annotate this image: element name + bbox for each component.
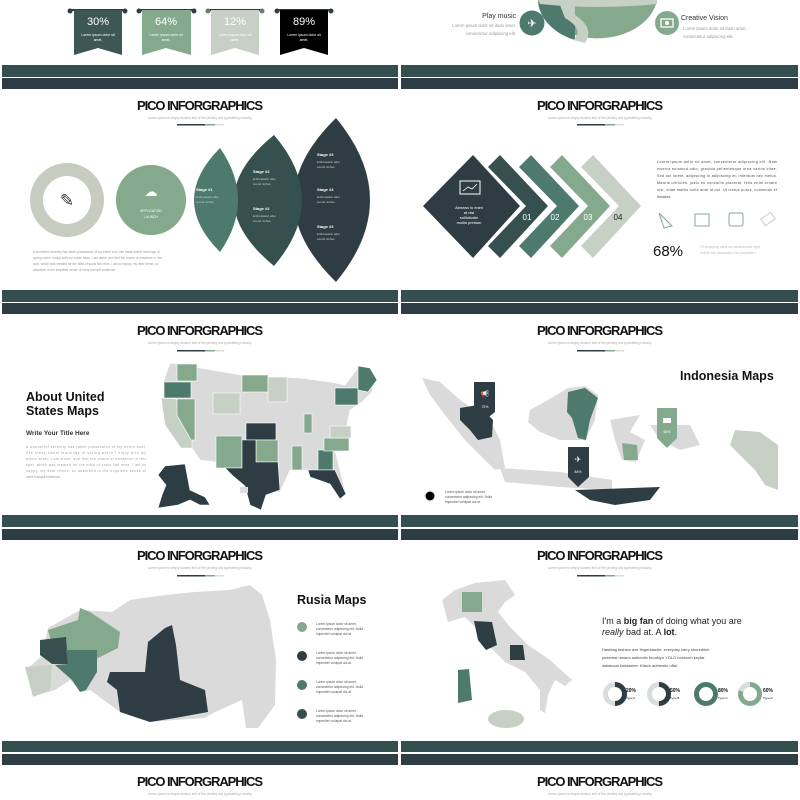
application launch circle: APPLICATION: [140, 209, 162, 213]
donut charts: Type B: [670, 696, 679, 700]
heading: Lorem Ipsum is simply dummy text of the printing and typesetting industry.: [548, 116, 652, 120]
legend list: consectetur adipiscing elit. Nulla: [316, 685, 363, 689]
heading: bottom-right slide: PICO INFORGRAPHICS: [537, 774, 663, 789]
heading: [537, 548, 663, 576]
application launch circle: LAUNCH: [144, 215, 158, 219]
legend list: consectetur adipiscing elit. Nulla: [316, 627, 363, 631]
stage 2 petal: sound niches.: [253, 219, 272, 223]
panel: Russia slide: [25, 548, 367, 728]
legend: imperdiet volutpat dui at.: [445, 500, 481, 504]
heading: [537, 323, 663, 352]
Play music: Play music: [482, 13, 516, 20]
icon: camera: [655, 11, 679, 35]
legend list: Lorem ipsum dolor sit amet,: [316, 622, 357, 626]
stage 2 petal: Stage #2: [253, 169, 270, 174]
legend list: Lorem ipsum dolor sit amet,: [316, 651, 357, 655]
text block: Lorem ipsum dolor sit amet, consectetur adipiscing elit. Nam: [657, 160, 777, 164]
pin 65%: [657, 408, 677, 448]
icon: plane: ✈: [527, 18, 537, 30]
text block: Sed dui lorem, adipiscing in adipiscing et, interdum nec metus.: [657, 174, 777, 178]
heading: [137, 323, 263, 352]
banner 64%: 64%: [155, 16, 177, 28]
panel: US map slide: [26, 323, 377, 510]
stage 3 petal: Enthusiastic after: [317, 232, 340, 236]
panel: Indonesia slide: [422, 323, 778, 505]
stage 3 petal: Enthusiastic after: [317, 195, 340, 199]
chevron 03: [550, 155, 610, 258]
chevron 02: 02: [551, 213, 560, 222]
heading: bottom-right slide: [537, 774, 663, 796]
heading: [137, 548, 263, 576]
panel: stages slide: [30, 98, 370, 282]
heading: PICO INFORGRAPHICS: [537, 98, 663, 113]
about text: spot, which was created for the bliss of souls like mine. I am so: [26, 463, 146, 467]
banner 64%: amet,: [162, 38, 170, 42]
heading: PICO INFORGRAPHICS: [137, 323, 263, 338]
banner 30%: 30%: [87, 16, 109, 28]
icon ring: ✎: [60, 191, 74, 210]
stat 68%: 68%: [653, 243, 683, 260]
stage 3 petal: Stage #3: [317, 187, 334, 192]
legend list: imperdiet volutpat dui at.: [316, 690, 352, 694]
banner 12%: 12%: [224, 16, 246, 28]
main diamond: Aenean in enim: [455, 205, 484, 210]
banner 64%: Lorem ipsum dolor sit: [149, 33, 183, 37]
Russia map: [25, 585, 276, 728]
pin 72%: 72%: [481, 405, 489, 409]
chevron 03: 03: [584, 213, 593, 222]
Creative Vision: consectetur adipiscing elit.: [683, 34, 733, 39]
legend list: imperdiet volutpat dui at.: [316, 632, 352, 636]
Creative Vision: [681, 15, 747, 39]
legend list: imperdiet volutpat dui at.: [316, 661, 352, 665]
Play music: consectetur adipiscing elit.: [466, 31, 516, 36]
legend list: [297, 622, 363, 723]
quote text: [602, 616, 742, 668]
banner 89%: amet,: [300, 38, 308, 42]
legend list: Lorem ipsum dolor sit amet,: [316, 709, 357, 713]
donut charts: Type C: [718, 696, 728, 700]
stage 1 petal: [194, 148, 238, 252]
application launch circle: [116, 165, 186, 235]
banner 89%: [274, 8, 334, 55]
heading: PICO INFORGRAPHICS: [137, 548, 263, 563]
text block: tincidunt.: [657, 195, 671, 199]
icon ring: [30, 163, 104, 237]
stage 3 petal: Enthusiastic after: [317, 160, 340, 164]
donut charts: Type D: [763, 696, 773, 700]
quote text: I'm a big fan of doing what you are: [602, 616, 742, 626]
about text: A wonderful serenity has taken possession of my entire soul,: [26, 445, 146, 449]
heading: bottom-left slide: [137, 774, 263, 796]
text block: Mauris ultricies, justo eu convallis placerat, felis enim ornare: [657, 181, 777, 185]
legend list: consectetur adipiscing elit. Nulla: [316, 656, 363, 660]
icon: plane: [520, 10, 544, 36]
banner 12%: [206, 8, 264, 55]
chevron 02: [519, 155, 579, 258]
panel: globe (top-right): [452, 0, 747, 43]
donut charts: 80%: [718, 688, 729, 694]
heading: PICO INFORGRAPHICS: [137, 98, 263, 113]
banner 89%: Lorem ipsum dolor sit: [287, 33, 321, 37]
panel: diamonds slide: [423, 98, 777, 260]
legend list: imperdiet volutpat dui at.: [316, 719, 352, 723]
Creative Vision: Lorem ipsum dolor sit dudu amet,: [683, 26, 747, 31]
pin 84%: 84%: [574, 470, 582, 474]
panel: banners (top-left): [68, 8, 334, 55]
quote text: waistcoat kickstarter. Kitsch authentic offal.: [602, 663, 678, 668]
donut charts: Type A: [626, 696, 635, 700]
about text: happy, my dear friend, so absorbed in the exquisite sense of: [26, 469, 146, 473]
heading: Lorem Ipsum is simply dummy text of the printing and typesetting industry.: [548, 566, 652, 570]
text block: [657, 160, 777, 199]
donut charts: 60%: [763, 688, 774, 694]
heading: bottom-right slide: Lorem Ipsum is simply dummy text of the printing and typesetting industry.: [548, 792, 652, 796]
paragraph: [33, 250, 162, 272]
chevron 04: 04: [614, 213, 623, 222]
stage 3 petal: [294, 118, 370, 282]
heading: [537, 98, 663, 126]
donut charts: 20%: [626, 688, 637, 694]
about text: [26, 390, 146, 479]
about text: mere tranquil existence.: [26, 475, 61, 479]
main diamond: sollicitudin: [460, 215, 478, 220]
panel: Italy slide: [442, 548, 774, 728]
stat 68%: before the transaction its completed.: [700, 251, 756, 255]
US map: [158, 363, 377, 510]
banner 89%: 89%: [293, 16, 315, 28]
main diamond: mollis pretium: [457, 220, 482, 225]
stat 68%: [653, 243, 760, 260]
legend list: Lorem ipsum dolor sit amet,: [316, 680, 357, 684]
heading: Lorem Ipsum is simply dummy text of the printing and typesetting industry.: [548, 341, 652, 345]
application launch circle: ☁: [144, 184, 158, 199]
about text: whole heart. I am alone, and feel the charm of existence in this: [26, 457, 146, 461]
legend: consectetur adipiscing elit. Nulla: [445, 495, 492, 499]
chevron 01: [488, 155, 548, 258]
text block: viverra euismod odio, gravida pellentesque urna varius vitae.: [657, 167, 777, 171]
heading: [137, 98, 263, 126]
stage 2 petal: Enthusiastic after: [253, 177, 276, 181]
about text: States Maps: [26, 404, 99, 418]
about text: Write Your Title Here: [26, 430, 90, 437]
banner 30%: [68, 8, 128, 55]
quote text: pinterest umami authentic brooklyn YOLO heirloom keytar: [602, 655, 705, 660]
pin 72%: 📢: [481, 389, 490, 398]
stage 3 petal: Stage #3: [317, 224, 334, 229]
quote text: Hashtag fashion axe fingerstache, everyday carry shoreditch: [602, 647, 709, 652]
stage 2 petal: [234, 135, 302, 266]
heading: PICO INFORGRAPHICS: [537, 323, 663, 338]
pin 65%: 65%: [663, 430, 671, 434]
stat 68%: Of shopping carts are abandoned right: [700, 245, 760, 249]
about text: About United: [26, 390, 104, 404]
banner 30%: Lorem ipsum dolor sit: [81, 33, 115, 37]
donut charts: [606, 684, 774, 704]
stage 2 petal: Enthusiastic after: [253, 214, 276, 218]
stage 3 petal: sound niches.: [317, 237, 336, 241]
Italy map: [442, 580, 572, 728]
stage 3 petal: Stage #3: [317, 152, 334, 157]
stage 1 petal: sound niches.: [196, 200, 215, 204]
banner 12%: amet,: [231, 38, 239, 42]
heading: Lorem Ipsum is simply dummy text of the printing and typesetting industry.: [148, 566, 252, 570]
legend list: consectetur adipiscing elit. Nulla: [316, 714, 363, 718]
chevron 04: [581, 155, 641, 258]
stage 2 petal: sound niches.: [253, 182, 272, 186]
donut charts: 50%: [670, 688, 681, 694]
paragraph: spot, which was created for the bliss of souls like mine. I am so happy, my dear friend, so: [33, 262, 159, 266]
stage 3 petal: sound niches.: [317, 200, 336, 204]
Indonesia map: [422, 378, 778, 505]
Indonesia title: Indonesia Maps: [680, 369, 774, 383]
paragraph: spring which I enjoy with my whole heart. I am alone, and feel the charm of existence in this: [33, 256, 162, 260]
heading: PICO INFORGRAPHICS: [537, 548, 663, 563]
Rusia title: Rusia Maps: [297, 593, 367, 607]
banner 64%: [136, 8, 196, 55]
Creative Vision: Creative Vision: [681, 15, 728, 22]
quote text: really bad at. A lot.: [602, 627, 677, 637]
heading: Lorem Ipsum is simply dummy text of the printing and typesetting industry.: [148, 341, 252, 345]
heading: bottom-left slide: Lorem Ipsum is simply dummy text of the printing and typesetting industry.: [148, 792, 252, 796]
text block: nisi, vitae mattis nulla ante id dui. Ut lectus purus, commodo et: [657, 188, 777, 192]
about text: like these sweet mornings of spring which I enjoy with my: [26, 451, 146, 455]
heading: Lorem Ipsum is simply dummy text of the printing and typesetting industry.: [148, 116, 252, 120]
heading: bottom-left slide: PICO INFORGRAPHICS: [137, 774, 263, 789]
chevron 01: 01: [523, 213, 532, 222]
banner 12%: Lorem ipsum dolor sit: [218, 33, 252, 37]
main diamond: [423, 155, 520, 258]
banner 30%: amet,: [94, 38, 102, 42]
stage 2 petal: Stage #2: [253, 206, 270, 211]
legend: Lorem ipsum dolor sit amet,: [445, 490, 486, 494]
Play music: [452, 13, 516, 36]
pin 84%: [568, 447, 589, 487]
pin 84%: ✈: [575, 455, 582, 464]
stage 3 petal: sound niches.: [317, 165, 336, 169]
paragraph: absorbed in the exquisite sense of mere tranquil existence.: [33, 268, 116, 272]
icons row: [659, 212, 775, 228]
paragraph: A wonderful serenity has taken possession of my entire soul, like these sweet mornings of: [33, 250, 160, 254]
Play music: Lorem ipsum dolor sit dudu amet,: [452, 23, 516, 28]
legend: [426, 490, 492, 504]
main diamond: at nisl: [464, 210, 474, 215]
stage 1 petal: Enthusiastic after: [196, 195, 219, 199]
pin 72%: [474, 382, 495, 420]
stage 1 petal: Stage #1: [196, 187, 213, 192]
globe half: [538, 0, 657, 43]
